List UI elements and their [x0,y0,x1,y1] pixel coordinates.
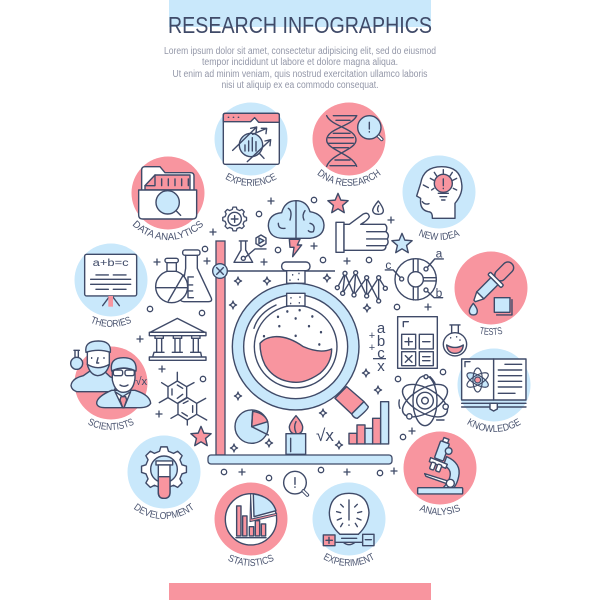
formula: x [377,358,385,375]
footer band [169,583,431,600]
icon: temple [149,318,206,360]
icon: blue star [392,233,412,253]
formula [369,320,386,375]
label: ANALYSIS [419,504,460,516]
icon: pink star lower [191,426,211,446]
intro text: Lorem ipsum dolor sit amet, consectetur adipisicing elit, sed do eiusmod [164,46,436,57]
label: KNOWLEDGE [467,418,521,432]
label: SCIENTISTS [88,418,134,430]
icon: lab flasks [156,250,212,303]
panel: knowledge [458,348,530,432]
stand clamp arm [227,270,335,272]
central stand and magnifier [208,241,392,464]
icon: blackboard: a+b=c [93,258,129,269]
marks: sparkles [229,274,382,452]
formula: + [369,342,375,354]
label: DNA RESEARCH [317,169,381,186]
icon: small flask with hexagon [234,235,266,262]
intro text: tempor incididunt ut labore et dolore magna aliqua. [202,57,398,68]
panel: development [128,436,200,519]
magnifier with flask [232,262,368,418]
formula: + [369,330,375,342]
icon: molecule [159,372,207,425]
icon: atom [397,375,453,426]
label: STATISTICS [228,554,274,566]
icon: charts in a circle [225,494,277,545]
icon: hand [336,201,388,252]
panel: theories [74,244,148,327]
icon: gear with test tube [142,447,186,498]
icon: dna helix with lens [327,116,382,166]
panel: statistics [214,482,288,566]
panel: dna research [312,102,386,186]
header band [169,0,431,27]
intro text: Ut enim ad minim veniam, quis nostrud exercitation ullamco laboris [172,69,428,80]
panel: scientists [70,340,152,430]
icon: folder with lens [139,167,197,219]
intro text: nisi ut aliquip ex ea commodo consequat. [222,80,378,91]
label: EXPERIENCE [226,172,277,186]
icon: dropper [468,257,518,315]
label: THEORIES [92,316,131,327]
title: RESEARCH INFOGRAPHICS [168,12,432,38]
icon: segmented ring chart [385,247,443,300]
icon: open book with atom [462,359,526,411]
square root symbol: √x [316,426,334,445]
icon: pink star top [328,193,348,213]
icon: two scientists: √x [135,376,148,388]
intro text [164,46,436,91]
icon: segmented ring chart: b [436,286,443,300]
stand clamp knob [213,264,227,278]
panel: experience [214,102,288,186]
icon: alert lens [284,471,307,495]
icon: head with light bulb [417,167,462,218]
formula: a [377,320,386,337]
label: DATA ANALYTICS [132,220,203,240]
icon: gear [223,207,247,231]
label: TESTS [480,326,502,335]
icon: brain cloud [268,201,324,257]
formula: c [377,345,385,362]
formula: b [377,333,385,350]
panel: experiment [312,482,386,566]
icon: segmented ring chart: a [436,247,443,261]
label: DEVELOPMENT [134,502,193,519]
candle [286,416,306,454]
marks: plus signs and rings [137,197,446,481]
icon: segmented ring chart: c [385,258,391,272]
stand base [208,455,392,464]
icon: molecule chain [335,271,387,303]
panel: tests [454,252,528,335]
label: NEW IDEA [418,229,460,240]
icon: calculator [398,317,437,368]
bar chart [349,402,389,444]
pie chart [235,410,268,443]
icon: microscope [418,437,463,494]
label: EXPERIMENT [324,552,374,566]
panel: data analytics [132,156,204,240]
icon: analytics window [223,113,279,164]
icon: light bulb and battery [323,493,374,546]
panel: analysis [404,432,476,516]
panel: new idea [402,156,476,240]
stand pole [216,241,225,455]
icon: round flask [443,325,467,356]
